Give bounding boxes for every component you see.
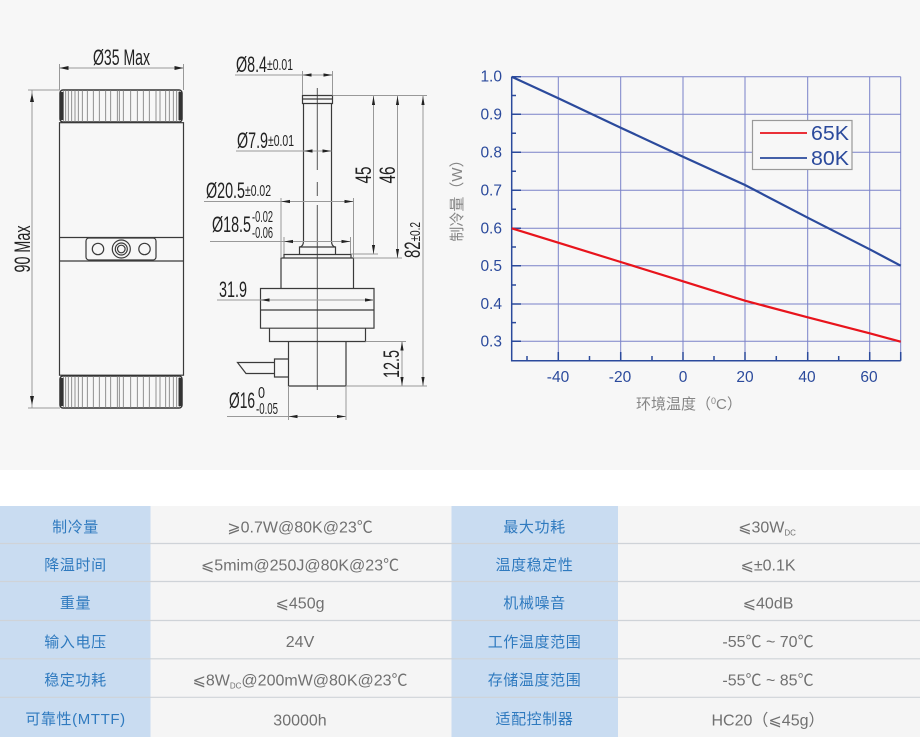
- y axis labels: 1.0: [480, 68, 502, 86]
- row 1: ⩾0.7W@80K@23℃: [227, 520, 373, 536]
- row 5: 存储温度范围: [488, 672, 581, 689]
- dimension: length 45: [351, 96, 378, 254]
- dimension: length 46: [354, 96, 402, 258]
- drawing: cooler outer view: [10, 45, 184, 408]
- dimension: length 90 max: [10, 90, 60, 408]
- x axis labels: 0: [679, 369, 688, 386]
- row 1: 最大功耗: [503, 519, 566, 536]
- knurled bottom cap: [60, 376, 182, 408]
- row 5: -55℃ ~ 85℃: [722, 672, 814, 690]
- drawing: cold finger side view: [204, 52, 427, 420]
- row 3: 机械噪音: [503, 595, 566, 612]
- dimension: diameter 18.5: Ø18.5: [212, 212, 251, 237]
- line: 65K: [512, 228, 901, 342]
- dimension: length 82: 82±0.2: [400, 222, 425, 258]
- dimension: diameter 20.5: [204, 178, 354, 258]
- dimension: flange width 31.9: [217, 277, 374, 302]
- row 2: 温度稳定性: [495, 557, 574, 574]
- y axis labels: 0.3: [480, 334, 502, 350]
- dimension: diameter 16: Ø16: [229, 388, 255, 413]
- x axis title: C）: [716, 396, 742, 413]
- x axis labels: -40: [547, 369, 570, 386]
- legend: 65K: [811, 123, 850, 145]
- row 1: 制冷量: [52, 519, 99, 536]
- dimension: diameter 20.5: ±0.02: [245, 183, 271, 200]
- dimension: diameter 8.4: Ø8.4: [236, 52, 267, 77]
- stepped housing and flange: [260, 247, 374, 386]
- cylinder body: [60, 123, 184, 375]
- row 1: ⩽30W: [738, 520, 784, 536]
- connector plate: [86, 238, 156, 260]
- knurled top cap: [60, 90, 182, 122]
- row 4: 输入电压: [44, 634, 107, 651]
- chart: cooling capacity vs ambient temperature: [449, 68, 901, 413]
- dimension: diameter 7.9: Ø7.9: [237, 128, 268, 153]
- dimension: diameter 18.5: -0.02: [252, 209, 273, 226]
- dimension: diameter 16: [227, 385, 346, 420]
- dimension: flange width 31.9: 31.9: [219, 277, 247, 302]
- y axis labels: 0.5: [480, 258, 502, 275]
- line: 80K: [512, 77, 901, 266]
- side port and cable: [238, 359, 288, 377]
- dimension: diameter 20.5: Ø20.5: [206, 178, 245, 203]
- dimension: length 90 max: 90 Max: [10, 226, 35, 272]
- x axis labels: 20: [736, 369, 754, 386]
- x axis labels: 40: [798, 369, 816, 386]
- dimension: diameter 8.4: ±0.01: [267, 57, 293, 74]
- dimension: diameter 7.9: ±0.01: [268, 133, 294, 150]
- y axis labels: 0.8: [480, 144, 502, 162]
- row 3: ⩽40dB: [743, 596, 793, 612]
- table backgrounds: [0, 506, 920, 737]
- dimension: diameter 35 max: [60, 45, 184, 90]
- legend: [752, 120, 852, 170]
- centre band: [60, 238, 184, 261]
- x axis labels: [547, 369, 878, 386]
- row 2: 降温时间: [44, 557, 107, 574]
- y axis labels: 0.4: [480, 296, 502, 313]
- row 5: ⩽8W: [192, 672, 230, 690]
- row 3: 重量: [60, 595, 91, 612]
- dimension: diameter 18.5: -0.06: [252, 225, 273, 242]
- row 6: 适配控制器: [495, 711, 574, 728]
- x axis labels: 60: [860, 369, 878, 386]
- dimension: diameter 8.4: [235, 52, 332, 95]
- dimension: length 12.5: [366, 342, 406, 386]
- row 1: DC: [784, 528, 796, 538]
- row 2: [44, 557, 796, 574]
- y axis labels: [480, 68, 502, 350]
- y axis labels: 0.6: [480, 220, 502, 238]
- grid: [512, 77, 901, 361]
- dimension: diameter 18.5: [210, 209, 350, 254]
- row 2: ⩽5mim@250J@80K@23℃: [201, 558, 399, 574]
- row 3: [60, 595, 793, 612]
- dimension: diameter 16: -0.05: [256, 401, 278, 418]
- dimension: length 46: 46: [375, 166, 400, 184]
- legend: 80K: [811, 148, 850, 170]
- x axis title: 0: [711, 396, 716, 406]
- y axis labels: 0.7: [480, 182, 502, 200]
- cold finger tube and cap: [300, 96, 335, 247]
- row 6: HC20（⩽45g）: [711, 712, 825, 730]
- dimension: length 82: [332, 96, 427, 386]
- row 6: [25, 711, 825, 730]
- row 6: 30000h: [273, 712, 327, 730]
- x axis labels: -20: [609, 369, 632, 386]
- row 5: DC: [230, 682, 242, 690]
- x axis title: 环境温度（: [636, 396, 711, 413]
- row 4: 24V: [286, 634, 315, 651]
- row 4: [44, 634, 814, 651]
- y axis title: 制冷量（W）: [449, 152, 466, 242]
- row 5: 稳定功耗: [44, 672, 107, 689]
- axes and ticks: [512, 77, 901, 361]
- row 5: @200mW@80K@23℃: [241, 672, 408, 690]
- dimension: length 12.5: 12.5: [379, 350, 404, 378]
- row 1: [52, 519, 796, 538]
- dimension: diameter 7.9: [236, 128, 332, 153]
- row 4: -55℃ ~ 70℃: [722, 634, 814, 651]
- spec table: [0, 506, 920, 737]
- dimension: diameter 16: 0: [258, 385, 265, 402]
- dimension: length 45: 45: [351, 166, 376, 184]
- row 2: ⩽±0.1K: [740, 558, 796, 574]
- centre line: [316, 88, 318, 390]
- dimension: diameter 35 max: Ø35 Max: [93, 45, 150, 70]
- row 3: ⩽450g: [276, 596, 324, 612]
- y axis labels: 0.9: [480, 106, 502, 124]
- row 5: [44, 672, 814, 690]
- row 4: 工作温度范围: [488, 634, 581, 651]
- row 6: 可靠性(MTTF): [25, 711, 126, 728]
